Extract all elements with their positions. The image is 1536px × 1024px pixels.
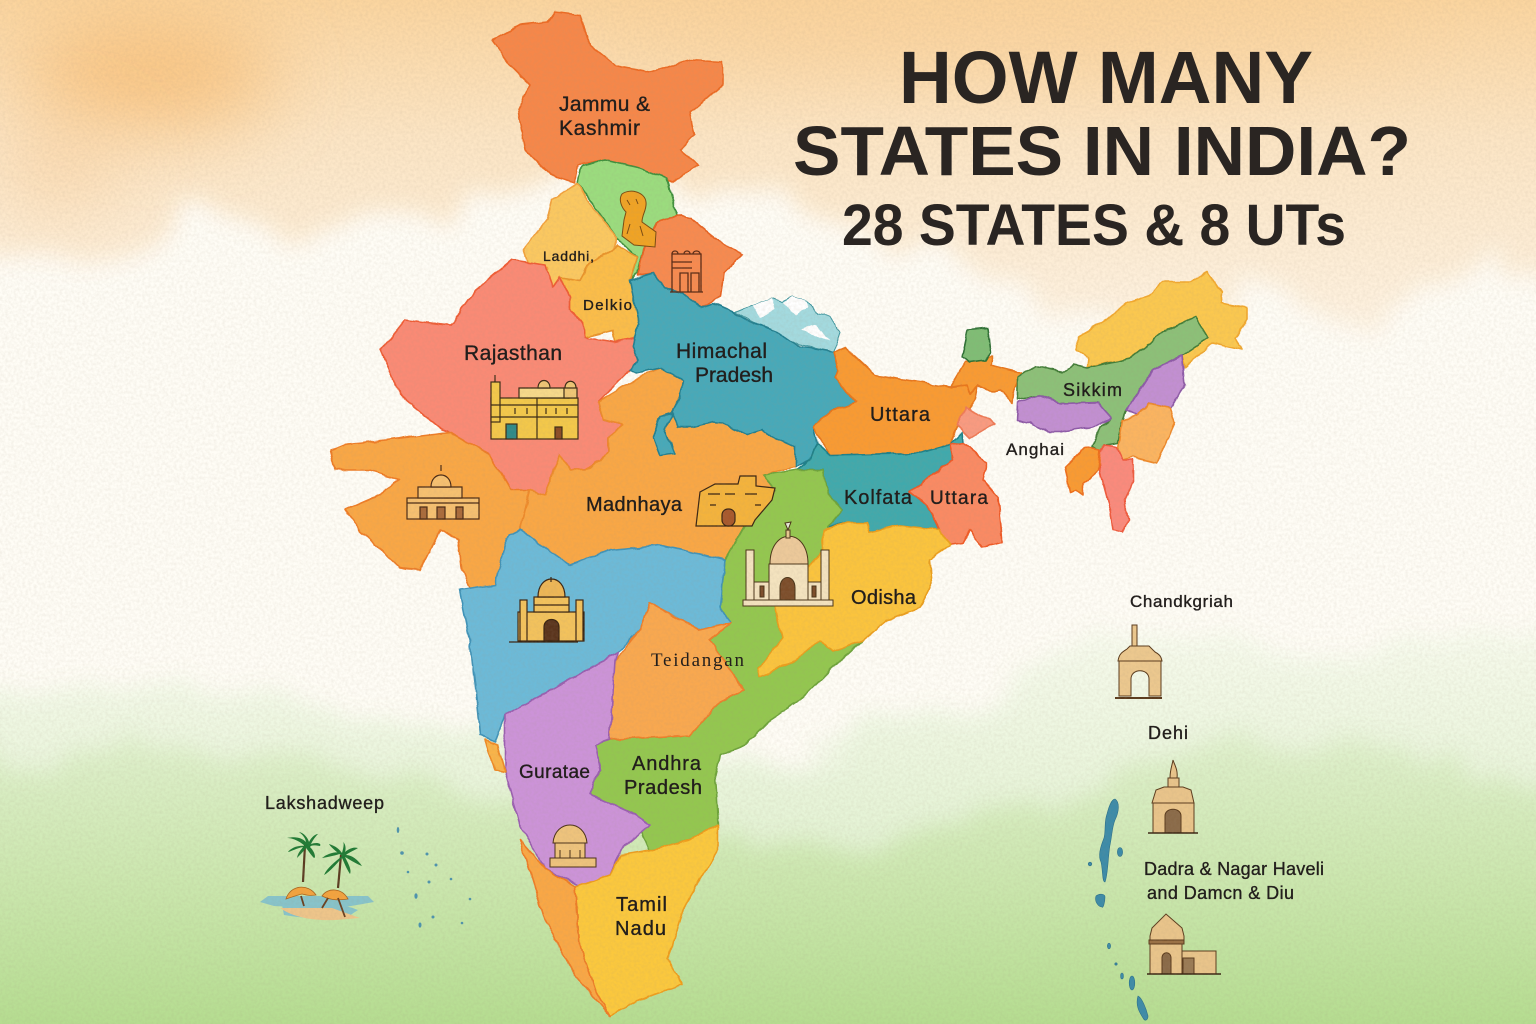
state: orange south-east <box>1065 447 1100 495</box>
title: 28 STATES & 8 UTs <box>842 193 1346 258</box>
state: Laddhi <box>523 183 617 287</box>
state and territory labels: Laddhi, <box>543 248 594 264</box>
title: STATES IN INDIA? <box>793 112 1411 190</box>
icon: Dehi monument <box>1148 760 1198 833</box>
state: red strip <box>1098 445 1133 532</box>
state: Madnhaya <box>520 368 795 565</box>
state and territory labels: Dehi <box>1148 723 1188 743</box>
state: Sikkim green <box>1018 317 1208 452</box>
icon: golden rock <box>620 191 656 247</box>
icon: Dadra building <box>1147 914 1221 974</box>
icon: fort outline <box>670 251 703 292</box>
state and territory labels: Himachal <box>676 340 767 363</box>
state: Goa <box>485 740 505 772</box>
state: Uttarakhand orange <box>638 215 742 307</box>
state and territory labels: Sikkim <box>1063 380 1122 400</box>
state and territory labels: Dadra & Nagar Haveli <box>1144 859 1324 879</box>
state: Guratae <box>505 652 650 887</box>
state: Maharashtra blue <box>460 530 730 742</box>
state: Odisha <box>758 523 950 677</box>
state and territory labels: Guratae <box>519 762 590 783</box>
state and territory labels: Tamil <box>616 894 667 916</box>
state: light orange <box>1118 403 1175 463</box>
water: teal pond <box>653 413 675 455</box>
state: Uttara east <box>910 443 1002 547</box>
state and territory labels: Pradesh <box>624 777 702 799</box>
state and territory labels: Uttara <box>930 488 988 509</box>
Andaman and Nicobar islands <box>1088 799 1148 1020</box>
state and territory labels: Kolfata <box>844 487 913 509</box>
state and territory labels: Lakshadweep <box>265 793 384 813</box>
state and territory labels: Nadu <box>615 918 666 940</box>
state and territory labels: and Damcn & Diu <box>1147 883 1294 903</box>
state: small salmon <box>957 408 995 438</box>
state: Delkio <box>560 245 638 342</box>
icon: Lakshadweep palm island <box>260 832 374 920</box>
icon: Madnhaya fort <box>696 476 775 526</box>
icon: snowy mountains <box>735 297 840 352</box>
state: Teidangan <box>610 603 745 740</box>
icon: Gujarat temple <box>407 465 479 519</box>
state and territory labels: Madnhaya <box>586 494 683 516</box>
icon: Maharashtra palace <box>509 577 584 642</box>
state and territory labels: Odisha <box>851 587 917 609</box>
state and territory labels: Rajasthan <box>464 342 562 365</box>
state: purple west <box>1017 395 1112 432</box>
state and territory labels <box>265 93 1324 940</box>
state: Tamil Nadu <box>575 825 718 1016</box>
state: purple east <box>1127 355 1185 415</box>
state and territory labels: Teidangan <box>651 650 744 671</box>
states and union territories <box>330 12 1247 1016</box>
state and territory labels: Andhra <box>632 753 702 775</box>
icon: Chandkgriah gate <box>1115 625 1162 698</box>
state: Jammu & Kashmir <box>492 12 722 183</box>
state: Kerala <box>520 840 610 1016</box>
state: Chhattisgarh and Andhra green <box>590 470 863 850</box>
title: HOW MANY <box>899 36 1313 119</box>
icon: mosque <box>743 522 833 606</box>
state: Uttara north <box>813 347 978 455</box>
state and territory labels: Uttara <box>870 404 931 426</box>
icon: Guratae temple <box>550 825 596 867</box>
map of India <box>260 12 1247 1020</box>
state: Arunachal yellow <box>1077 272 1247 367</box>
title <box>793 36 1411 258</box>
state and territory labels: Kashmir <box>559 117 640 140</box>
state and territory labels: Delkio <box>583 297 632 314</box>
state and territory labels: Pradesh <box>695 364 773 387</box>
state: Himachal Pradesh teal <box>630 273 857 467</box>
state and territory labels: Jammu & <box>559 93 650 116</box>
state: Nepal-side orange strip <box>950 357 1022 403</box>
state: Ladakh green <box>578 160 677 280</box>
icon: Rajasthan palace <box>491 375 578 439</box>
state: Kolfata <box>797 432 963 532</box>
state and territory labels: Anghai <box>1006 440 1064 459</box>
state: small green top <box>962 328 991 362</box>
state and territory labels: Chandkgriah <box>1130 592 1233 611</box>
Lakshadweep islets <box>397 827 471 928</box>
state: Rajasthan <box>381 260 638 495</box>
state: Gujarat <box>330 432 530 590</box>
